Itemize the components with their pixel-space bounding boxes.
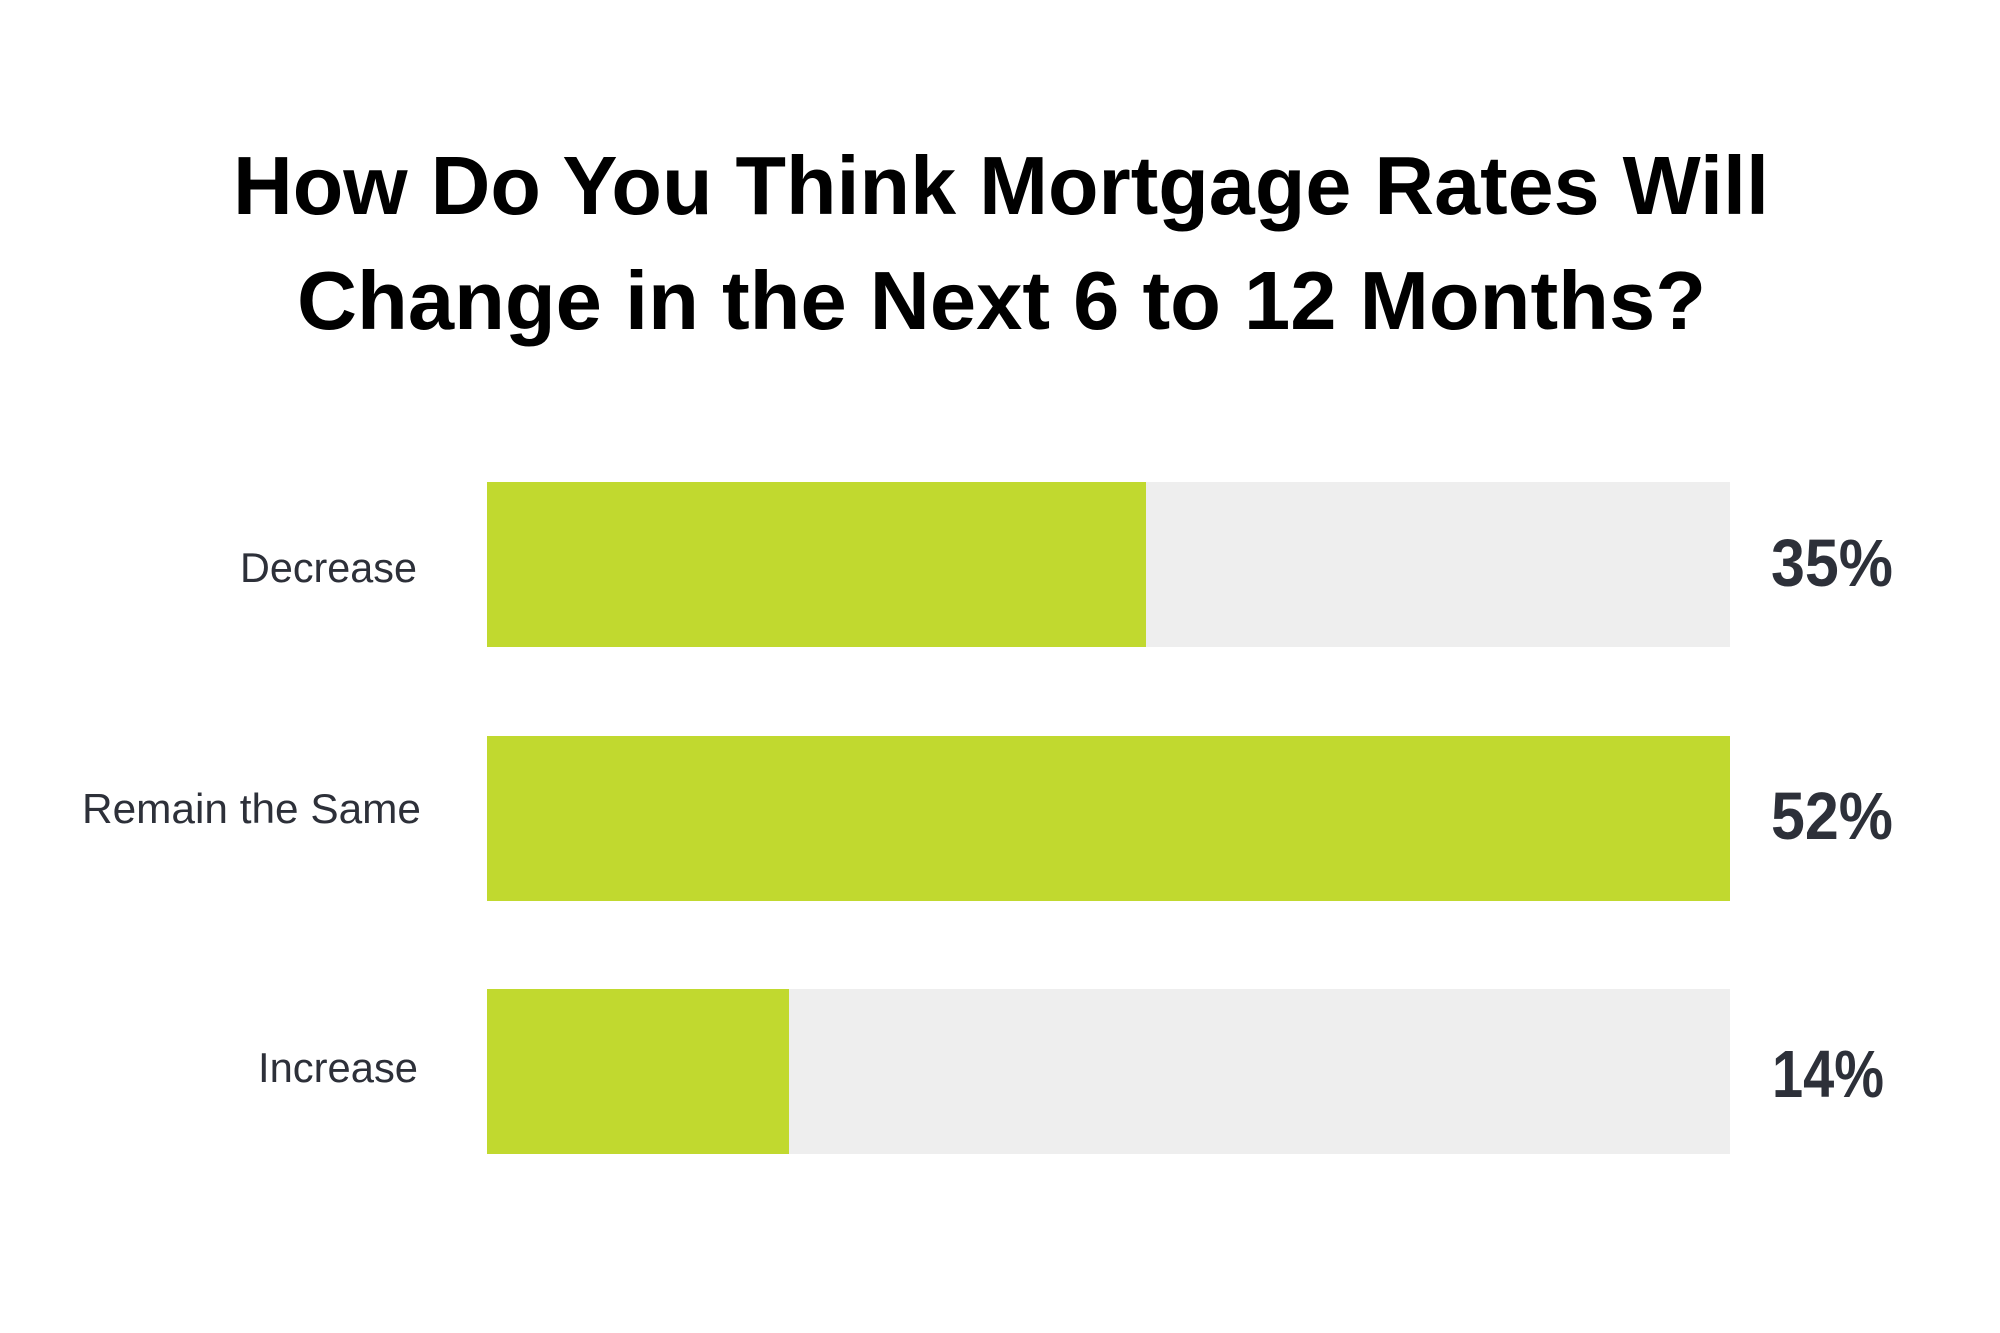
row: Increase: 14% (1772, 1037, 1884, 1112)
row: Remain the Same: Remain the Same (82, 785, 421, 832)
title: Change in the Next 6 to 12 Months? (297, 254, 1706, 347)
row: Remain the Same: 52% (1771, 779, 1893, 854)
bar chart (82, 482, 1893, 1154)
row: Decrease: 35% (1771, 526, 1893, 601)
row: Increase (258, 989, 1884, 1154)
title: How Do You Think Mortgage Rates Will (233, 139, 1769, 232)
row: Decrease: Decrease (240, 544, 417, 591)
row: Increase: Increase (258, 1044, 418, 1091)
row: Remain the Same (82, 736, 1893, 901)
row: Decrease (240, 482, 1893, 647)
title (233, 139, 1769, 347)
